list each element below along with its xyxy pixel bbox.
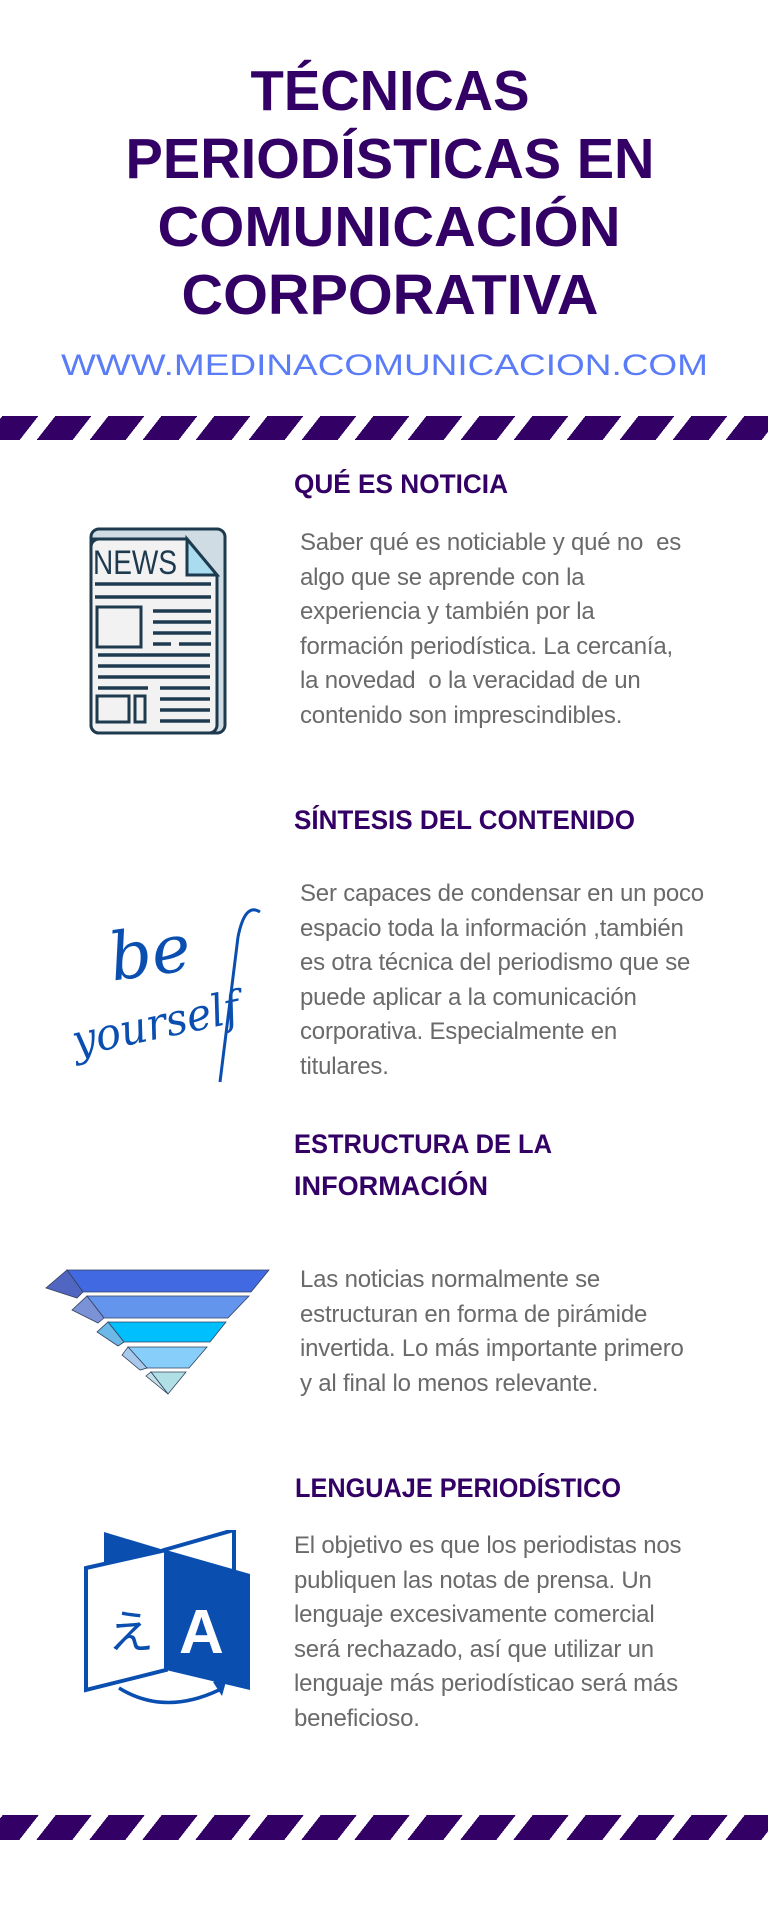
text: estructura: Las noticias normalmente se — [300, 1266, 600, 1293]
text: qué es noticia: experiencia y también por la — [300, 598, 595, 625]
title: PERIODÍSTICAS EN — [126, 127, 654, 191]
title: CORPORATIVA — [182, 263, 598, 327]
text: lenguaje: beneficioso. — [294, 1705, 420, 1732]
icon: inverted pyramid — [45, 1269, 270, 1394]
icon: translate — [84, 1530, 250, 1704]
text: lenguaje: El objetivo es que los periodistas nos — [294, 1532, 681, 1559]
text: síntesis: Ser capaces de condensar en un poco — [300, 880, 704, 907]
text: lenguaje: lenguaje más periodísticao será más — [294, 1670, 678, 1697]
icon: newspaper — [90, 528, 226, 734]
heading: qué es noticia: QUÉ ES NOTICIA — [294, 468, 508, 499]
text: síntesis: corporativa. Especialmente en — [300, 1018, 617, 1045]
text: qué es noticia: algo que se aprende con la — [300, 564, 584, 591]
text: síntesis: puede aplicar a la comunicación — [300, 984, 637, 1011]
heading: estructura de la información: INFORMACIÓN — [294, 1170, 488, 1201]
text: qué es noticia: contenido son imprescindibles. — [300, 702, 622, 729]
website url: WWW.MEDINACOMUNICACION.COM — [61, 349, 708, 382]
title — [126, 59, 654, 327]
heading: estructura de la información: ESTRUCTURA DE LA — [294, 1129, 552, 1159]
icon: be yourself lettering: yourself — [70, 981, 250, 1067]
heading: síntesis del contenido: SÍNTESIS DEL CONTENIDO — [294, 804, 635, 835]
text: lenguaje — [294, 1532, 681, 1732]
text: lenguaje: publiquen las notas de prensa. Un — [294, 1567, 652, 1594]
text: estructura: y al final lo menos relevante. — [300, 1370, 598, 1397]
text: qué es noticia: formación periodística. La cercanía, — [300, 633, 673, 660]
text: síntesis: espacio toda la información ,también — [300, 915, 684, 942]
text: lenguaje: será rechazado, así que utilizar un — [294, 1636, 654, 1663]
heading: lenguaje periodístico: LENGUAJE PERIODÍSTICO — [295, 1472, 621, 1503]
text: estructura — [300, 1266, 684, 1397]
title: TÉCNICAS — [250, 59, 530, 123]
icon: translate: A — [179, 1598, 224, 1667]
title: COMUNICACIÓN — [158, 195, 620, 259]
icon: newspaper: NEWS — [93, 544, 177, 582]
text: estructura: estructuran en forma de pirámide — [300, 1301, 647, 1328]
text: síntesis — [300, 880, 704, 1080]
text: qué es noticia — [300, 529, 681, 729]
text: qué es noticia: Saber qué es noticiable y qué no es — [300, 529, 681, 556]
text: qué es noticia: la novedad o la veracidad de un — [300, 667, 641, 694]
text: síntesis: es otra técnica del periodismo que se — [300, 949, 690, 976]
text: síntesis: titulares. — [300, 1053, 389, 1080]
icon: be yourself lettering: be — [104, 909, 195, 996]
text: lenguaje: lenguaje excesivamente comercial — [294, 1601, 654, 1628]
text: estructura: invertida. Lo más importante primero — [300, 1335, 684, 1362]
icon: be yourself lettering — [70, 908, 261, 1082]
heading: estructura de la información — [294, 1129, 552, 1201]
icon: translate: え — [108, 1596, 154, 1662]
